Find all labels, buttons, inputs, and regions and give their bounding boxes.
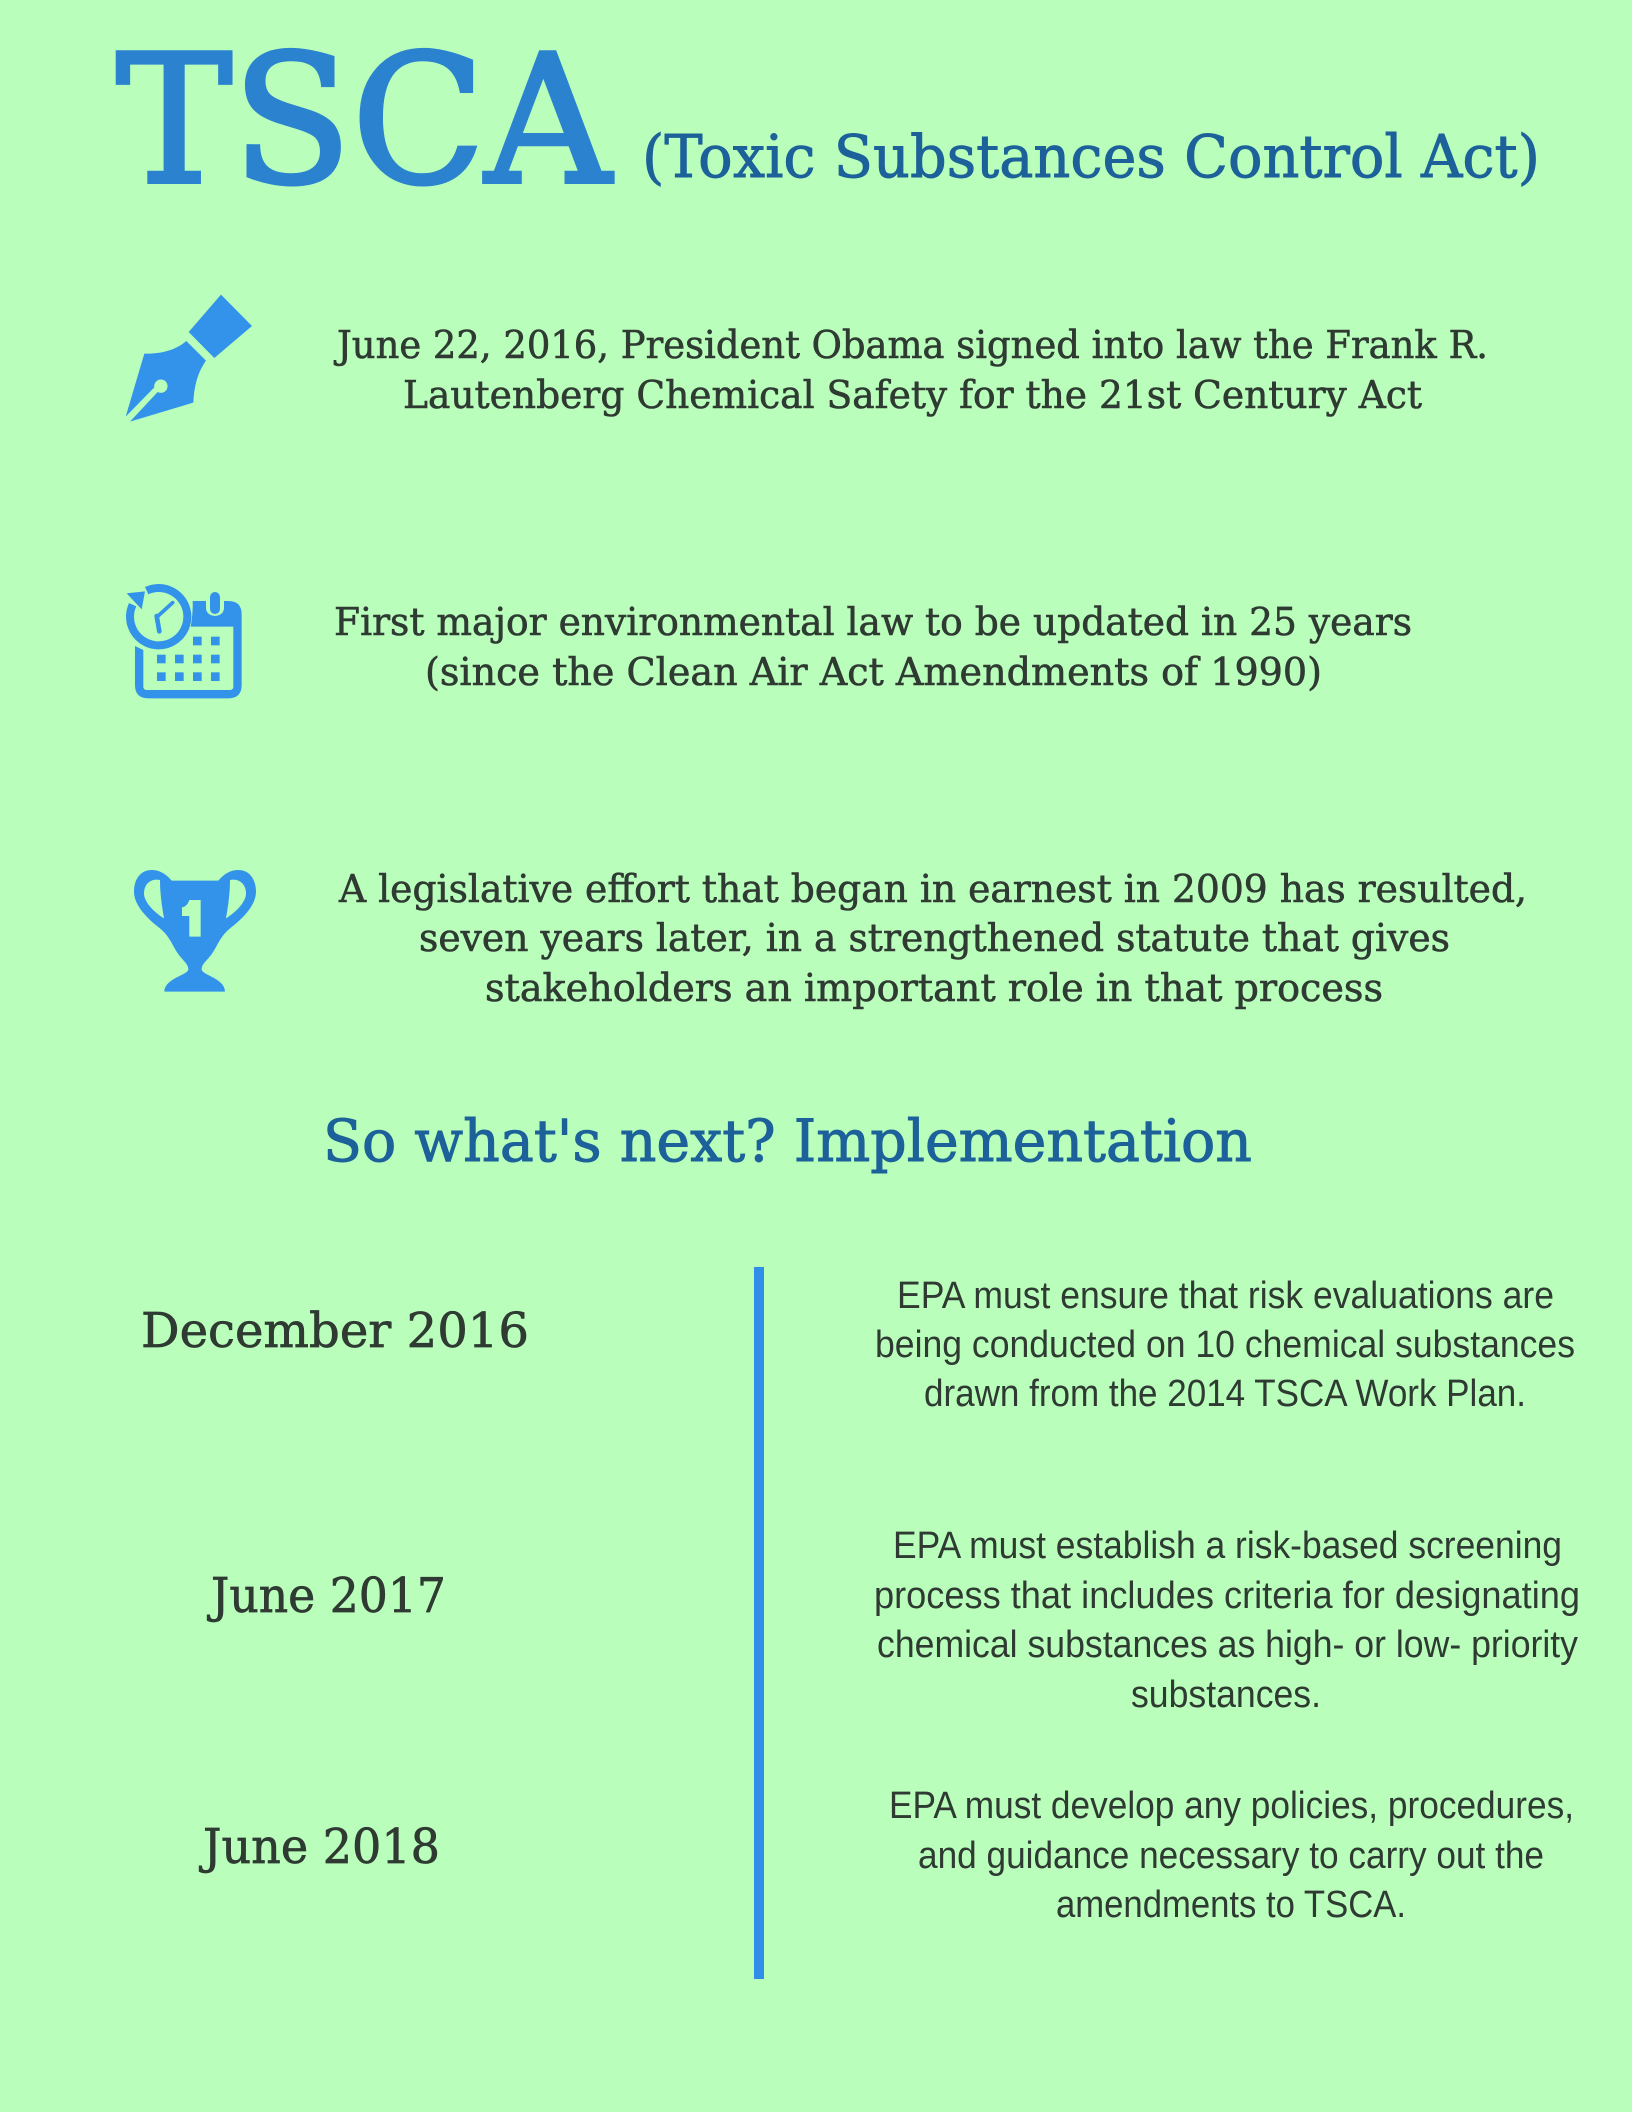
milestone text: June 2017: EPA must establish a risk-based screening — [893, 1525, 1562, 1567]
text: legislative effort: seven years later, in a strengthened statute that gives — [419, 916, 1450, 960]
heading: what's next: So what's next? Implementation — [323, 1107, 1252, 1175]
timeline divider — [754, 1267, 764, 1979]
text: first major update: (since the Clean Air Act Amendments of 1990) — [425, 650, 1322, 694]
text: legislative effort: A legislative effort that began in earnest in 2009 has resulted, — [338, 867, 1527, 911]
date: June 2017: June 2017 — [206, 1568, 446, 1624]
milestone text: June 2018 — [889, 1785, 1574, 1926]
milestone text: June 2017: substances. — [1131, 1674, 1321, 1716]
text: law signed — [333, 323, 1488, 417]
milestone text: June 2017: process that includes criteria for designating — [874, 1575, 1580, 1617]
text: legislative effort: stakeholders an important role in that process — [485, 966, 1383, 1010]
milestone text: December 2016: drawn from the 2014 TSCA Work Plan. — [924, 1373, 1526, 1415]
text: law signed: Lautenberg Chemical Safety for the 21st Century Act — [403, 373, 1422, 417]
milestone text: December 2016 — [875, 1275, 1575, 1415]
icon: fountain pen nib — [126, 295, 252, 422]
title: TSCA — [116, 17, 613, 224]
text: first major update: First major environmental law to be updated in 25 years — [334, 600, 1412, 644]
milestone text: June 2018: EPA must develop any policies, procedures, — [889, 1785, 1574, 1827]
milestone text: June 2017: chemical substances as high- or low- priority — [877, 1624, 1578, 1666]
milestone text: June 2017 — [874, 1525, 1580, 1716]
icon: calendar with clock — [127, 588, 242, 698]
milestone text: June 2018: and guidance necessary to carry out the — [918, 1835, 1544, 1877]
milestone text: December 2016: being conducted on 10 chemical substances — [875, 1324, 1575, 1366]
text: law signed: June 22, 2016, President Obama signed into law the Frank R. — [333, 323, 1488, 367]
date: June 2018: June 2018 — [198, 1819, 440, 1875]
milestone text: June 2018: amendments to TSCA. — [1056, 1884, 1406, 1926]
subtitle: (Toxic Substances Control Act) — [642, 122, 1540, 191]
text: legislative effort — [338, 867, 1527, 1010]
milestone text: December 2016: EPA must ensure that risk evaluations are — [897, 1275, 1554, 1317]
title — [116, 17, 1540, 224]
text: first major update — [334, 600, 1412, 694]
icon: trophy — [134, 870, 256, 992]
numeral 1 — [182, 900, 201, 937]
date: December 2016: December 2016 — [141, 1303, 529, 1359]
